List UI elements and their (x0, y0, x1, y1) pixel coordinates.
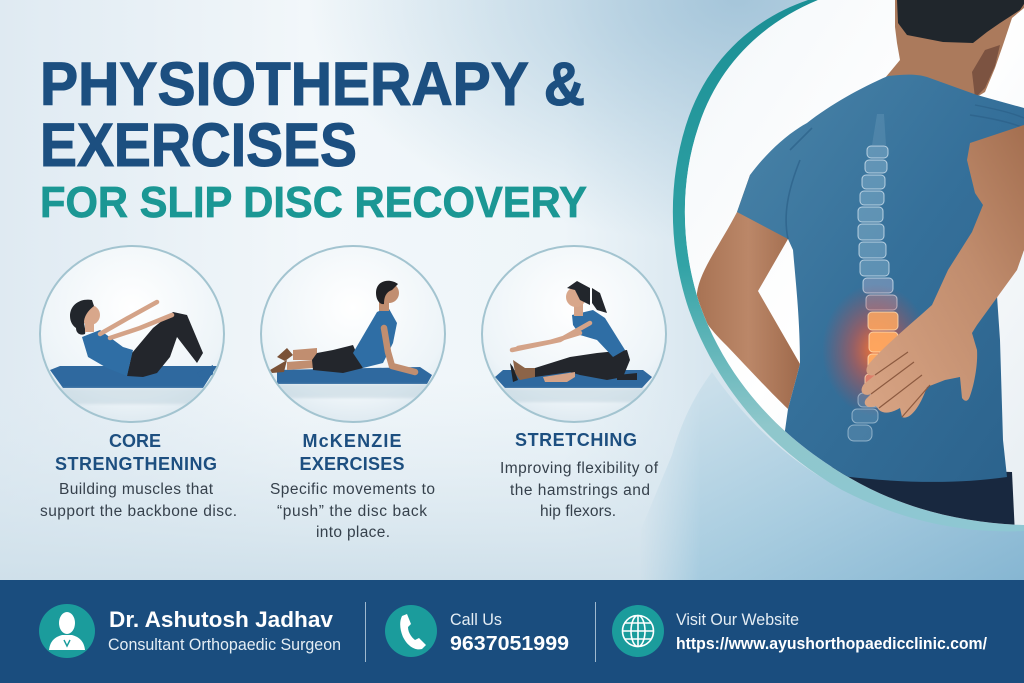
panel: stretching (482, 246, 666, 520)
heading: STRENGTHENING (55, 454, 217, 474)
icon: man's neck and head (885, 0, 1024, 98)
contact: phone number: 9637051999 (450, 632, 569, 655)
heading: EXERCISES (300, 454, 404, 474)
title (40, 50, 587, 227)
contact: doctor name: Consultant Orthopaedic Surgeon (108, 636, 341, 654)
title: EXERCISES (40, 111, 357, 179)
icon: inflammation glow (826, 290, 918, 412)
contact: doctor name: Dr. Ashutosh Jadhav (109, 607, 334, 632)
description: the hamstrings and (510, 482, 650, 499)
icon: press-up illustration (261, 246, 445, 422)
contact: website: Visit Our Website (676, 610, 799, 629)
icon: glowing spine (858, 114, 897, 310)
description: Specific movements to (270, 481, 435, 498)
description: Improving flexibility of (500, 460, 659, 477)
heading: McKENZIE (302, 431, 402, 451)
description: Building muscles that (59, 481, 214, 498)
photo panel: man with back pain (660, 0, 1024, 540)
panel: core strengthening (40, 246, 237, 520)
heading: STRETCHING (515, 430, 637, 450)
icon: jeans (832, 466, 1014, 525)
icon: phone (385, 605, 437, 657)
icon: seated stretch illustration (482, 246, 666, 422)
description: into place. (316, 524, 390, 541)
icon: globe (612, 605, 664, 657)
title: FOR SLIP DISC RECOVERY (40, 178, 587, 227)
icon: t-shirt (737, 75, 1024, 482)
heading: CORE (109, 431, 161, 451)
description: “push” the disc back (277, 503, 427, 520)
icon: left arm (697, 175, 800, 409)
panel: McKenzie exercises (261, 246, 445, 541)
title: PHYSIOTHERAPY & (40, 50, 585, 118)
contact: phone number: Call Us (450, 610, 502, 629)
contact: doctor name (108, 607, 341, 654)
description: hip flexors. (540, 503, 616, 520)
icon: doctor (39, 604, 95, 658)
footer bar (0, 580, 1024, 683)
icon: sit-up illustration (40, 246, 224, 422)
contact: phone number (450, 610, 569, 655)
contact: website: https://www.ayushorthopaedicclinic.com/ (676, 635, 987, 653)
contact: website (676, 610, 987, 653)
icon: faded sacrum (848, 392, 878, 442)
description: support the backbone disc. (40, 503, 237, 520)
icon: lower spine (865, 312, 898, 390)
icon: right arm and hand (862, 125, 1024, 418)
